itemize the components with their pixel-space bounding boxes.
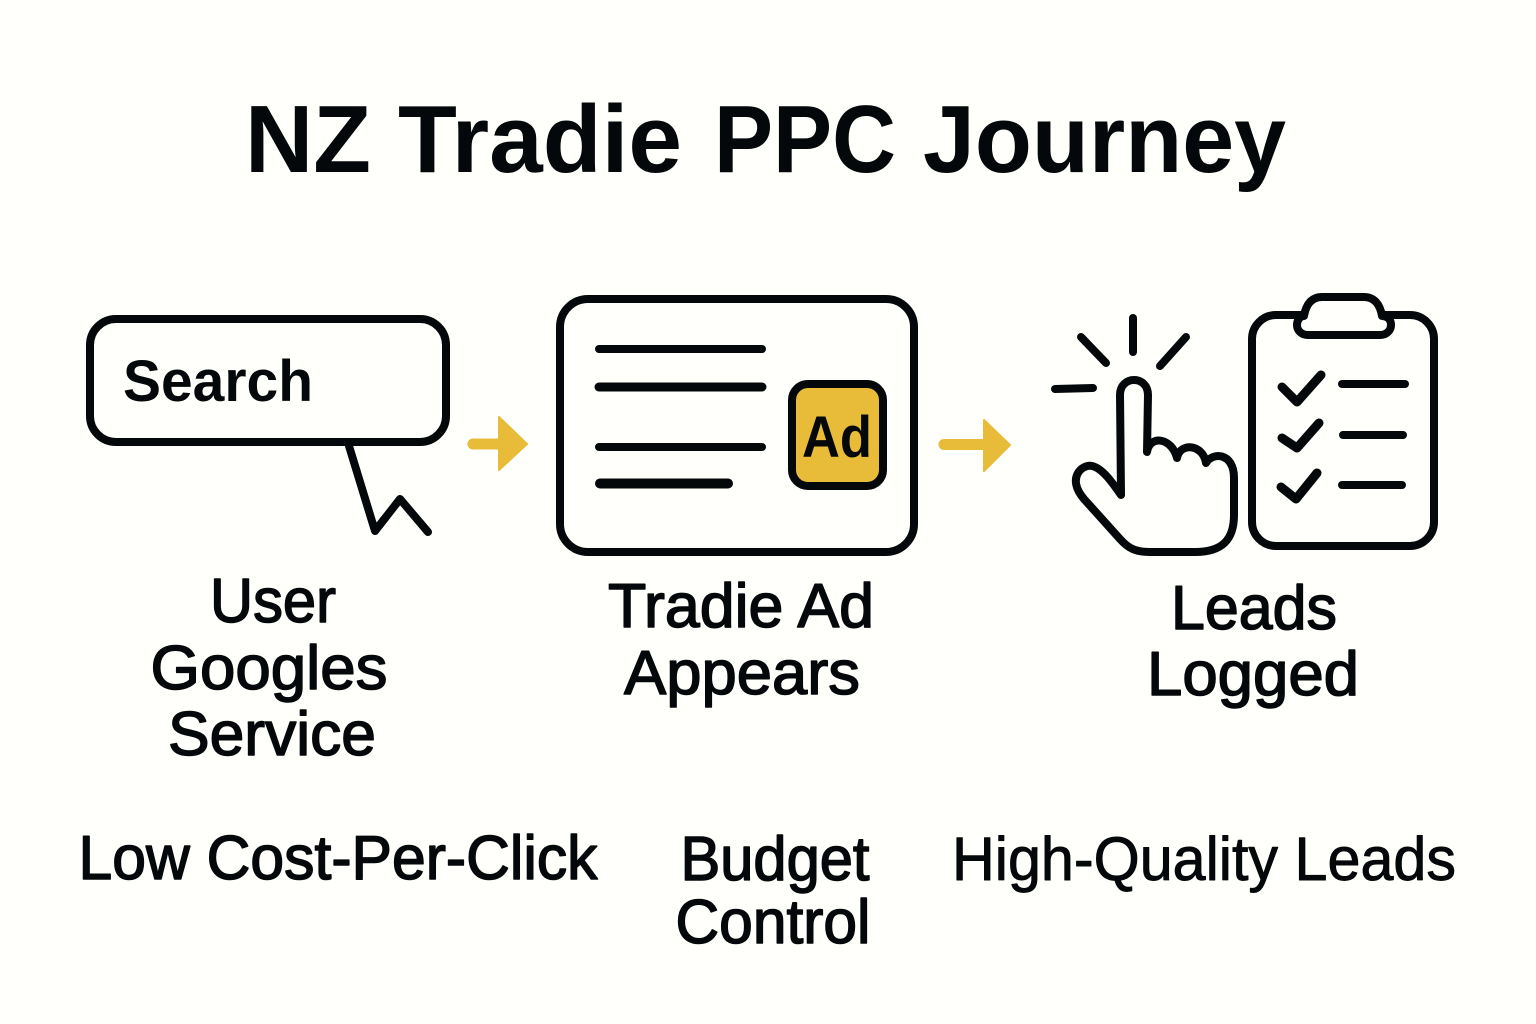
title: NZ	[245, 86, 371, 193]
benefit: budget control	[676, 825, 870, 957]
benefit: budget control: Control	[676, 888, 870, 957]
arrow: search to ad	[473, 417, 527, 470]
step 1 label: Googles	[150, 634, 388, 703]
icon: search box with cursor	[90, 319, 446, 532]
title: Tradie	[398, 86, 682, 193]
ad badge	[792, 384, 883, 486]
step 1 label: Service	[168, 700, 376, 769]
ad badge: Ad	[802, 405, 872, 470]
title: PPC	[714, 86, 896, 193]
step 1 label: User	[210, 567, 336, 636]
step 3 label: Logged	[1147, 640, 1359, 709]
step 3 label	[1147, 574, 1359, 709]
step 2 label: Tradie Ad	[608, 572, 874, 641]
step 1 label	[150, 567, 388, 769]
icon: ad panel	[560, 299, 914, 552]
search label: Search	[123, 349, 313, 414]
step 2 label	[608, 572, 874, 708]
icon: clipboard checklist	[1252, 297, 1434, 546]
step 3 label: Leads	[1171, 574, 1337, 643]
step 2 label: Appears	[624, 639, 860, 708]
title	[245, 86, 1286, 193]
icon: tapping hand	[1055, 318, 1234, 552]
benefit: budget control: Budget	[680, 825, 870, 894]
benefit: low cost: Low Cost-Per-Click	[78, 824, 598, 893]
arrow: ad to leads	[944, 420, 1010, 471]
benefit: high-quality leads: High-Quality Leads	[952, 825, 1456, 893]
title: Journey	[923, 86, 1286, 193]
